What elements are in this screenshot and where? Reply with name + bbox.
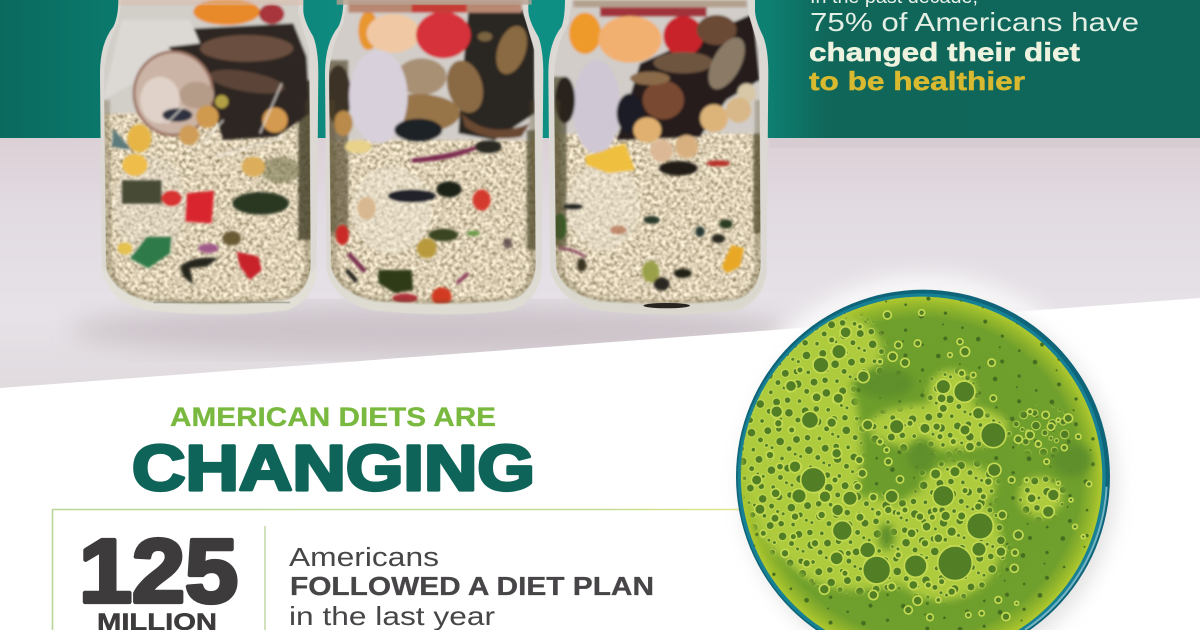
jar 2 photo xyxy=(325,0,545,314)
panel: white lower section xyxy=(0,298,1200,630)
table surface xyxy=(0,138,1200,393)
number 125: 125 xyxy=(79,522,238,622)
smoothie glow xyxy=(725,278,1125,630)
line: 75% of americans have: 75% of Americans have xyxy=(810,7,1139,37)
stat: 125 million xyxy=(79,522,238,630)
jar 1 photo xyxy=(100,0,320,314)
headline: changing: CHANGING xyxy=(132,432,535,504)
stat divider xyxy=(264,526,266,630)
smoothie rim xyxy=(736,290,1110,630)
smoothie drop shadow xyxy=(742,297,1116,630)
line: to be healthier: to be healthier xyxy=(809,66,1025,96)
line: americans: Americans xyxy=(289,544,439,572)
smoothie photo xyxy=(725,280,1125,630)
panel: photo background xyxy=(0,0,1200,393)
line: changed their diet: changed their diet xyxy=(809,37,1080,67)
stat panel frame xyxy=(52,510,740,630)
teal band xyxy=(0,0,1200,138)
smoothie surface xyxy=(741,297,1102,630)
small foam texture xyxy=(740,310,1074,603)
section heading xyxy=(132,402,535,504)
line: followed a diet plan: FOLLOWED A DIET PLAN xyxy=(290,573,654,601)
foam bubbles xyxy=(751,310,1092,621)
kicker: american diets are: AMERICAN DIETS ARE xyxy=(170,402,496,432)
jar 3 photo xyxy=(548,0,770,314)
stat description xyxy=(289,544,654,630)
jar shadow on table xyxy=(70,304,790,356)
callout: 75 percent changed diet xyxy=(809,0,1139,96)
